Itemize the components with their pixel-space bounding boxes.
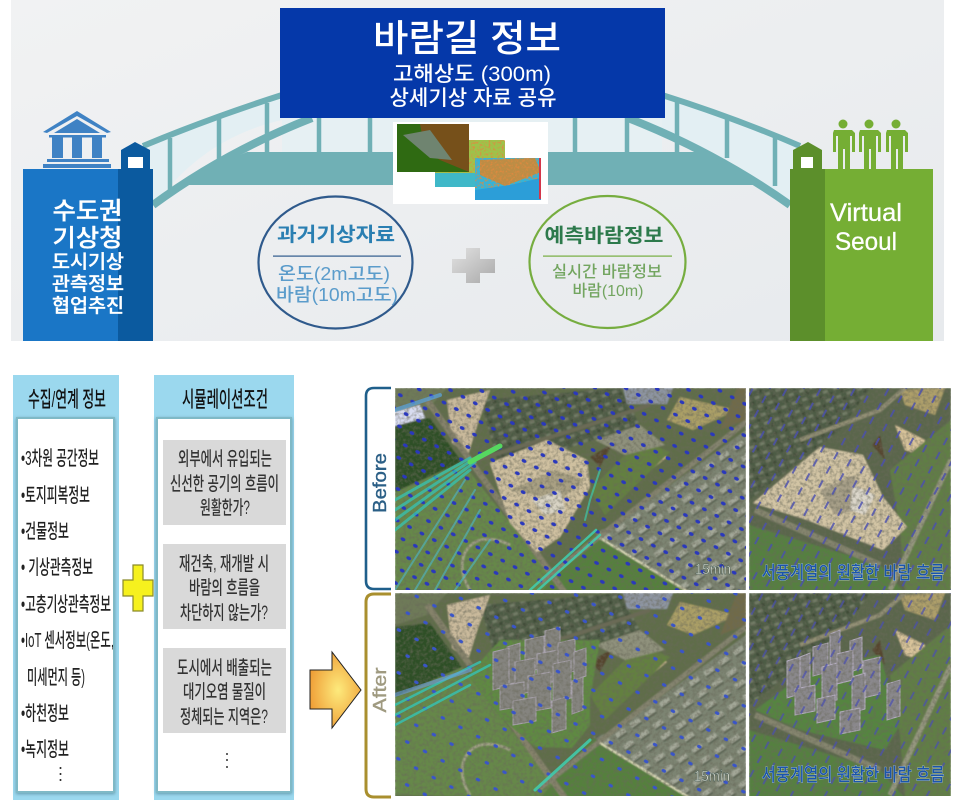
icon: three people bbox=[833, 120, 908, 169]
simulation image: before, wide view bbox=[395, 388, 746, 593]
bracket label: After: After bbox=[370, 667, 390, 712]
bracket label: After bbox=[366, 594, 391, 797]
left tower: metropolitan weather agency bbox=[23, 111, 153, 341]
Virtual Seoul label: Virtual bbox=[830, 199, 902, 227]
icon: yellow plus bbox=[123, 565, 153, 611]
list: •3차원 공간정보 bbox=[21, 447, 99, 470]
Virtual Seoul label bbox=[830, 199, 902, 256]
heading: 수집/연계 정보 bbox=[28, 387, 106, 412]
left tower text: 도시기상 bbox=[52, 251, 124, 273]
list: •녹지정보 bbox=[21, 738, 69, 761]
Virtual Seoul label: Seoul bbox=[835, 228, 897, 256]
bracket label: Before bbox=[366, 388, 391, 589]
panel: collected and linked information bbox=[13, 375, 119, 800]
list bbox=[21, 447, 114, 781]
subtitle bbox=[390, 63, 556, 110]
circle: forecast wind data bbox=[530, 196, 686, 328]
condition box 3: 도시에서 배출되는 bbox=[177, 657, 272, 679]
list: •IoT 센서정보(온도, bbox=[21, 629, 114, 652]
subtitle: 고해상도 (300m) bbox=[393, 63, 551, 86]
condition box 3 bbox=[163, 648, 286, 733]
timestamp: 15min bbox=[694, 768, 730, 785]
condition box 1: 외부에서 유입되는 bbox=[178, 448, 272, 470]
panel: simulation conditions bbox=[154, 375, 294, 800]
icon: grey plus bbox=[452, 248, 495, 283]
heading: 시뮬레이션조건 bbox=[182, 387, 268, 412]
circle: forecast wind data: 실시간 바람정보 bbox=[552, 263, 662, 281]
icon: government building bbox=[43, 111, 111, 168]
list: •건물정보 bbox=[21, 520, 69, 543]
title: 바람길 정보 bbox=[373, 18, 561, 59]
circle: past weather data: 바람(10m고도) bbox=[276, 285, 398, 305]
condition box 2: 차단하지 않는가? bbox=[180, 602, 268, 624]
right tower: Virtual Seoul bbox=[790, 120, 933, 341]
subtitle: 상세기상 자료 공유 bbox=[390, 87, 556, 110]
condition box 2: 재건축, 재개발 시 bbox=[179, 553, 269, 575]
title box bbox=[280, 8, 665, 118]
left tower text: 관측정보 bbox=[52, 273, 124, 295]
list: •하천정보 bbox=[21, 702, 69, 725]
panel: wind corridor bridge diagram bbox=[11, 0, 944, 341]
timestamp: 15min bbox=[695, 561, 731, 578]
simulation image: after, wide view bbox=[395, 593, 746, 798]
circle: past weather data: 과거기상자료 bbox=[277, 224, 395, 246]
bracket label: Before: Before bbox=[370, 453, 390, 513]
left tower text: 기상청 bbox=[52, 225, 122, 252]
simulation image: before, zoomed view bbox=[749, 388, 951, 593]
circle: past weather data bbox=[258, 196, 412, 328]
list: • 기상관측정보 bbox=[21, 556, 93, 579]
condition box 3: 대기오염 물질이 bbox=[183, 681, 266, 703]
list: 미세먼지 등) bbox=[27, 666, 85, 689]
left tower text: 수도권 bbox=[52, 198, 122, 225]
left tower text: 협업추진 bbox=[52, 295, 124, 317]
bridge bbox=[143, 95, 800, 205]
condition box 1: 원활한가? bbox=[200, 497, 250, 519]
condition box 2 bbox=[163, 544, 286, 629]
left tower text bbox=[52, 198, 124, 317]
condition box 3: 정체되는 지역은? bbox=[180, 706, 268, 728]
circle: past weather data: 온도(2m고도) bbox=[278, 264, 390, 284]
circle: forecast wind data: 바람(10m) bbox=[572, 282, 644, 300]
circle: forecast wind data: 예측바람정보 bbox=[544, 225, 664, 247]
simulation image: after, zoomed view bbox=[749, 593, 951, 798]
condition box 1 bbox=[163, 440, 286, 525]
condition box 2: 바람의 흐름을 bbox=[189, 577, 260, 599]
weather maps image bbox=[393, 122, 548, 204]
arrow bbox=[310, 652, 361, 728]
condition box 1: 신선한 공기의 흐름이 bbox=[170, 473, 279, 495]
list: •토지피복정보 bbox=[21, 484, 90, 507]
list: •고층기상관측정보 bbox=[21, 593, 111, 616]
